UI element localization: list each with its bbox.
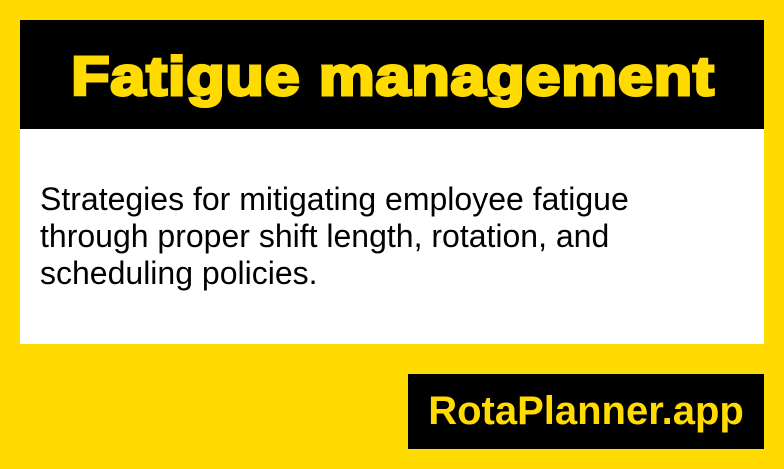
header banner — [20, 20, 764, 129]
description text — [40, 181, 629, 291]
description text: scheduling policies. — [40, 255, 318, 291]
panel: description — [20, 129, 764, 344]
description text: Strategies for mitigating employee fatigue — [40, 181, 629, 217]
brand name: RotaPlanner.app — [428, 389, 744, 433]
description text: through proper shift length, rotation, and — [40, 218, 609, 254]
brand badge — [408, 374, 764, 449]
title: Fatigue management — [71, 45, 715, 107]
